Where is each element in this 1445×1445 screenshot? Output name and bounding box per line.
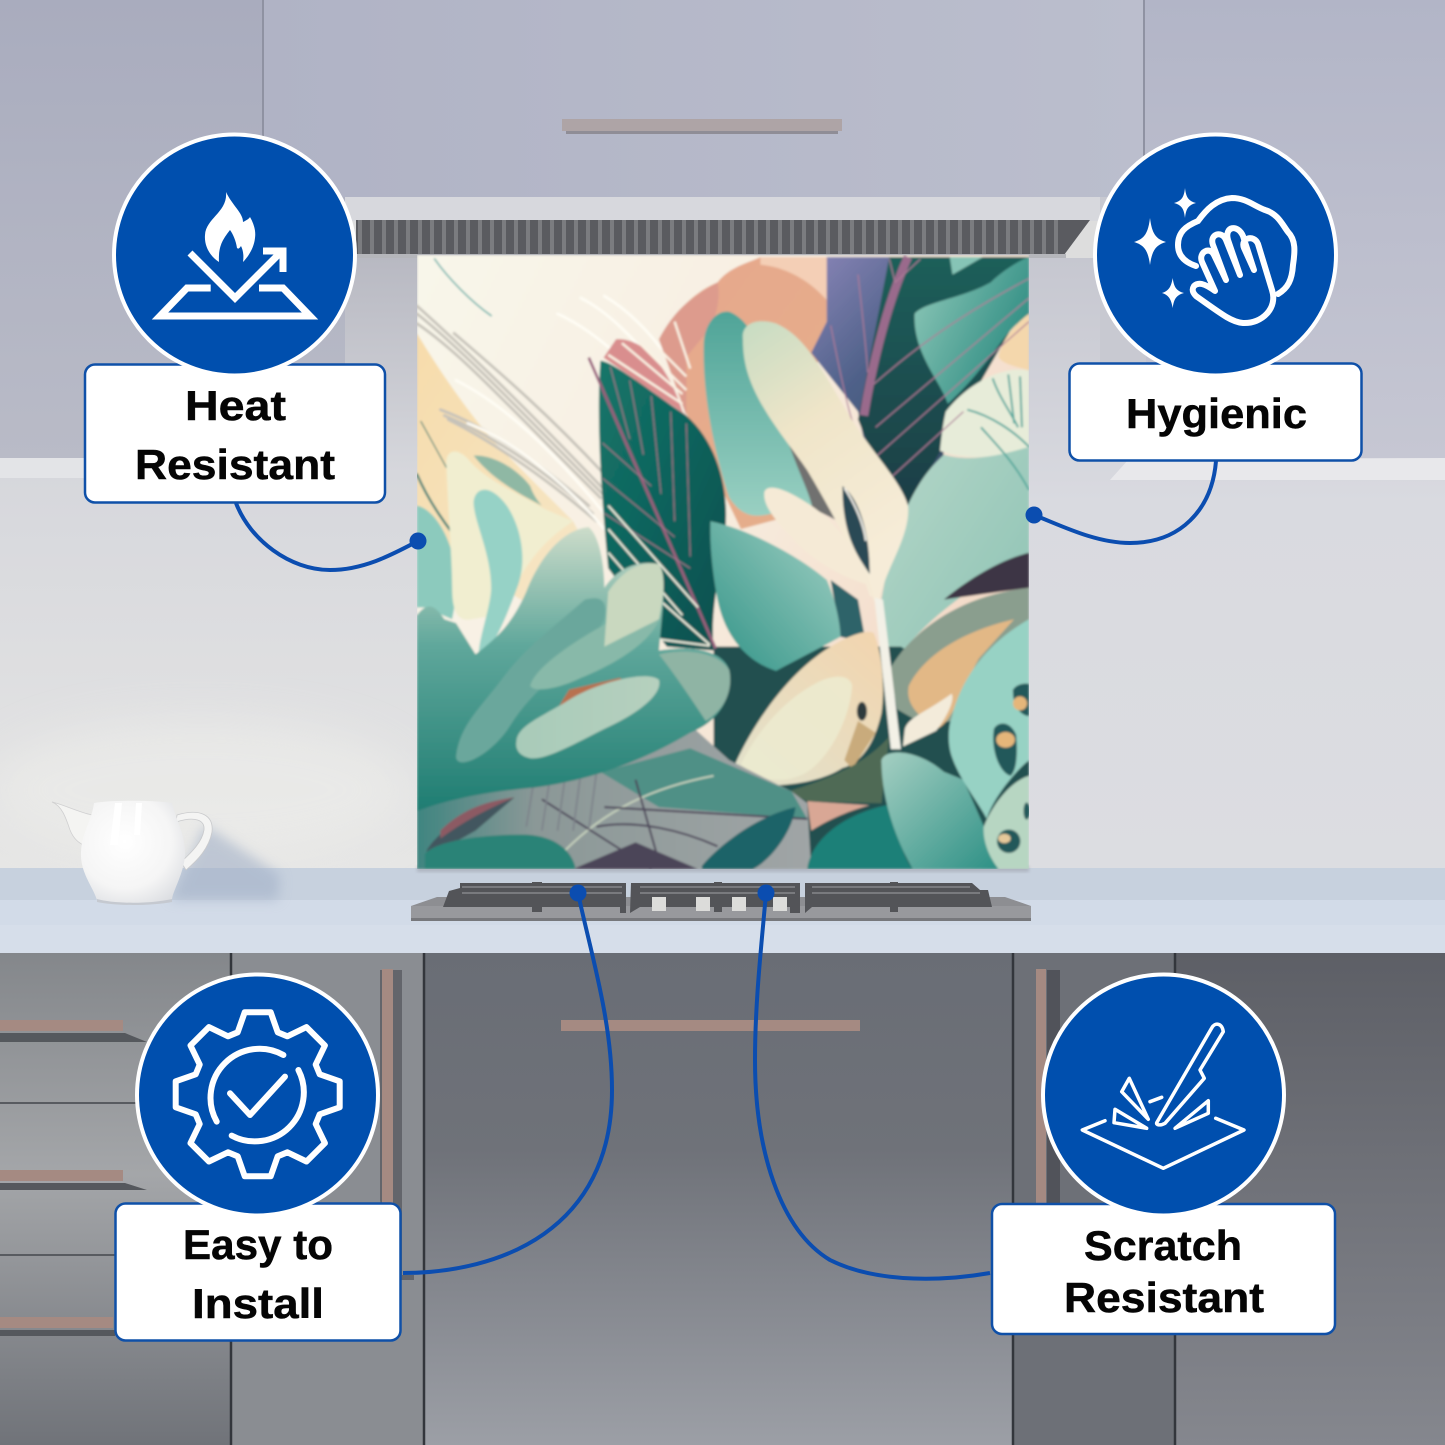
tan leaf xyxy=(908,619,1014,729)
icon: flame bouncing off surface xyxy=(160,192,310,316)
label box xyxy=(116,1204,400,1340)
mint corner xyxy=(950,257,983,275)
pale pill leaf xyxy=(516,676,659,758)
badge circle xyxy=(114,134,355,376)
teapot shadow xyxy=(170,825,280,900)
bottom teal leaf xyxy=(807,803,913,869)
brown striped patch xyxy=(554,678,630,715)
callout: heat resistant xyxy=(85,134,385,502)
callout: scratch resistant xyxy=(992,974,1335,1334)
dark left leaf xyxy=(426,798,514,852)
upper left cabinet xyxy=(0,0,345,478)
peach right shape xyxy=(999,314,1029,371)
inner foliage leaves xyxy=(456,563,663,762)
mint finger xyxy=(474,490,522,658)
heading: Easy to xyxy=(183,1221,333,1268)
heading: Scratch xyxy=(1084,1222,1242,1269)
left cream shape xyxy=(446,452,573,620)
lower cabinets xyxy=(0,953,1445,1445)
speckled top xyxy=(659,652,730,721)
teapot xyxy=(52,801,212,905)
middle teal leaf xyxy=(710,521,840,671)
extractor hood xyxy=(345,197,1100,258)
upper centre cabinet xyxy=(264,0,1144,197)
thin teal blades xyxy=(417,259,491,548)
grey shadow gap xyxy=(788,446,836,520)
splashback artwork: tropical leaves xyxy=(417,255,1030,869)
label box xyxy=(85,364,385,502)
spotted round leaf xyxy=(949,619,1029,819)
big mint leaf xyxy=(881,447,1029,670)
splashback artwork shadow xyxy=(417,866,1029,872)
green band xyxy=(600,748,807,819)
badge circle xyxy=(1095,134,1336,376)
top right leaf xyxy=(915,257,1029,404)
icon: hand wiping with sparkles xyxy=(1134,188,1294,323)
light peach top xyxy=(760,257,827,300)
dark sliver with white lines xyxy=(842,486,870,574)
heading: Heat xyxy=(185,382,286,429)
callout: hygienic xyxy=(1070,134,1362,460)
heading line 2: Resistant xyxy=(135,441,335,488)
purple stem and veins xyxy=(831,257,1029,486)
tall teal leaf xyxy=(704,312,812,516)
left mint leaf xyxy=(417,506,458,619)
small cream leaf xyxy=(762,486,820,520)
label box xyxy=(1070,364,1362,460)
pink sliver xyxy=(440,797,515,838)
small sage leaf xyxy=(474,455,542,506)
pale spotted leaf xyxy=(984,776,1030,869)
icon: gear with check xyxy=(176,1012,340,1176)
wall backsplash xyxy=(0,258,1445,870)
cream bud leaf xyxy=(734,630,884,787)
badge circle xyxy=(137,974,378,1216)
worktop xyxy=(0,868,1445,953)
upper right cabinet xyxy=(1100,0,1445,480)
bottom centre dark leaf xyxy=(702,807,796,869)
icon: knife scratching surface xyxy=(1082,1024,1244,1168)
dark wedge right xyxy=(944,553,1029,600)
left yellow glow xyxy=(417,334,578,600)
connector: heat resistant xyxy=(236,503,426,570)
dark fern fronds xyxy=(526,772,807,869)
lower right teal leaf xyxy=(881,752,1002,869)
pink striped leaf xyxy=(604,322,690,416)
bottom left leaf xyxy=(425,835,575,869)
heading: Hygienic xyxy=(1126,390,1307,437)
callout: easy to install xyxy=(116,974,400,1340)
main foliage mass xyxy=(417,527,730,811)
background wash xyxy=(417,255,1029,869)
small cream sprout xyxy=(903,694,952,746)
heading line 2: Resistant xyxy=(1064,1274,1264,1321)
olive ground shape xyxy=(788,737,889,803)
purple leaf xyxy=(810,256,945,469)
connector: hygienic xyxy=(1026,461,1216,543)
pale green shape xyxy=(940,370,1029,457)
feather fronds xyxy=(417,296,667,529)
cabinet handles xyxy=(0,969,1046,1328)
dark teal leaf xyxy=(858,257,1029,506)
grey-green leaf xyxy=(889,588,1029,725)
cooktop xyxy=(411,882,1031,921)
connector: easy to install xyxy=(403,884,612,1273)
peach shape xyxy=(684,256,828,530)
badge circle xyxy=(1043,974,1284,1216)
white stem xyxy=(874,598,901,749)
dark teal behind stem xyxy=(831,580,866,643)
deep green veined leaf xyxy=(589,358,726,651)
heading line 2: Install xyxy=(192,1280,324,1327)
connector: scratch resistant xyxy=(755,884,990,1279)
small palm xyxy=(967,374,1029,490)
dark lower base xyxy=(714,647,1029,869)
big cream leaf xyxy=(743,321,908,600)
label box xyxy=(992,1204,1335,1334)
pink patch xyxy=(659,282,719,416)
lower background band xyxy=(417,725,811,869)
pink patch lower xyxy=(807,801,870,831)
